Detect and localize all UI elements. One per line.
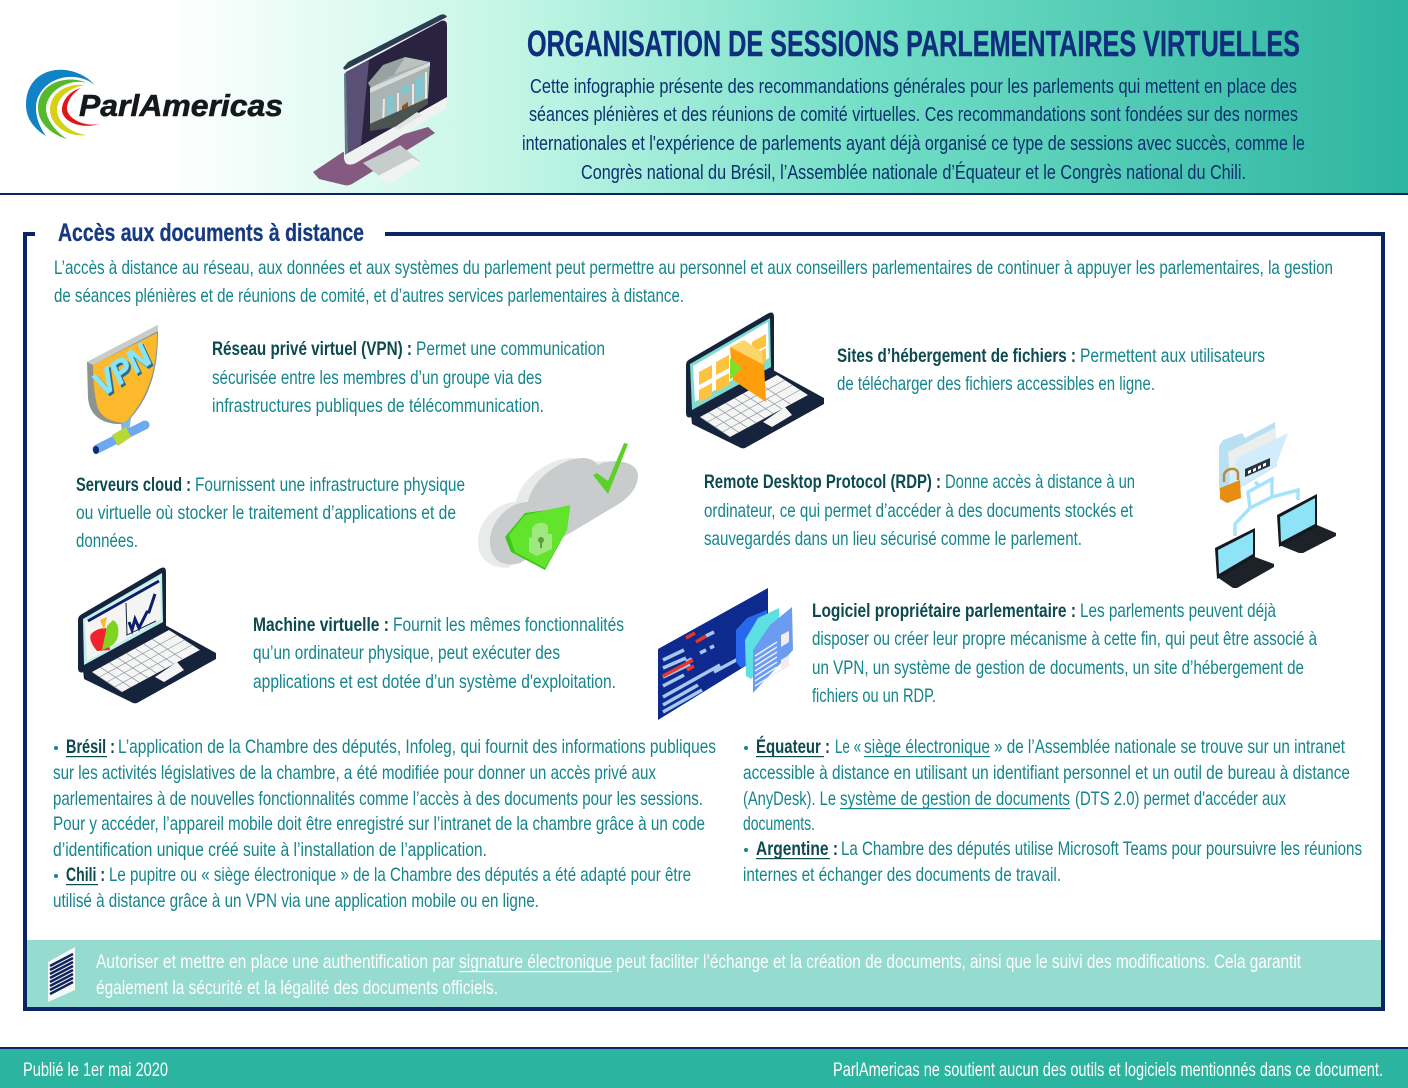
- icon: document: [48, 947, 75, 1002]
- icon: monitor showing parliament building: [313, 14, 447, 185]
- text: cloud servers: Fournissent une infrastructure physique: [195, 474, 465, 496]
- text: RDP: [704, 471, 1135, 550]
- text: Brazil and Chile examples: Chili :: [66, 864, 105, 886]
- text: Ecuador and Argentina examples: système de gestion de documents: [840, 788, 1070, 810]
- text: virtual machine: Machine virtuelle :: [253, 614, 389, 636]
- text: Brazil and Chile examples: [53, 736, 716, 912]
- callout: electronic signature: également la sécurité et la légalité des documents officiels.: [96, 977, 498, 999]
- section intro: de séances plénières et de réunions de comité, et d’autres services parlementaires à distance.: [54, 285, 684, 307]
- text: RDP: Remote Desktop Protocol (RDP) :: [704, 471, 941, 493]
- icon: folder, lock and networked laptops: [1215, 422, 1336, 588]
- icon: laptop with charts: [78, 568, 216, 703]
- text: cloud servers: [76, 474, 465, 552]
- icon: VPN shield: VPN: [88, 338, 161, 405]
- text: VPN: Permet une communication: [416, 338, 605, 360]
- text: file hosting sites: de télécharger des fichiers accessibles en ligne.: [837, 373, 1155, 395]
- text: Ecuador and Argentina examples: Le «: [835, 736, 861, 758]
- intro text: Congrès national du Brésil, l’Assemblée nationale d’Équateur et le Congrès national du Chili.: [581, 161, 1246, 184]
- text: Ecuador and Argentina examples: (DTS 2.0) permet d'accéder aux: [1075, 788, 1286, 810]
- icon: laptop with folder: [686, 313, 824, 448]
- footer: Publié le 1er mai 2020: [23, 1059, 168, 1081]
- logo: ParlAmericas: [26, 70, 283, 139]
- logo: ParlAmericas: ParlAmericas: [79, 88, 283, 123]
- text: Brazil and Chile examples: d’identification unique créé suite à l’installation de l’application.: [53, 839, 487, 861]
- header banner: [0, 0, 1408, 195]
- text: proprietary software: [812, 600, 1317, 707]
- text: Brazil and Chile examples: Le pupitre ou « siège électronique » de la Chambre des députés a été adapté pour être: [109, 864, 691, 886]
- text: Ecuador and Argentina examples: (AnyDesk). Le: [743, 788, 836, 810]
- text: Brazil and Chile examples: utilisé à distance grâce à un VPN via une application mobile ou en ligne.: [53, 890, 539, 912]
- text: RDP: sauvegardés dans un lieu sécurisé comme le parlement.: [704, 528, 1082, 550]
- text: Brazil and Chile examples: L’application de la Chambre des députés, Infoleg, qui fournit des informations publiques: [118, 736, 716, 758]
- text: Brazil and Chile examples: Pour y accéder, l’appareil mobile doit être enregistré sur l’intranet de la chambre grâce à un code: [53, 813, 705, 835]
- section intro: [54, 257, 1333, 307]
- text: Brazil and Chile examples: parlementaires à de nouvelles fonctionnalités comme l’accès à des documents pour les sessions.: [53, 788, 703, 810]
- text: proprietary software: Les parlements peuvent déjà: [1080, 600, 1276, 622]
- text: virtual machine: qu’un ordinateur physique, peut exécuter des: [253, 642, 560, 664]
- text: VPN: sécurisée entre les membres d’un groupe via des: [212, 367, 542, 389]
- text: Ecuador and Argentina examples: internes et échanger des documents de travail.: [743, 864, 1061, 886]
- text: Ecuador and Argentina examples: [743, 735, 1362, 886]
- text: Ecuador and Argentina examples: Équateur :: [756, 735, 830, 758]
- callout: electronic signature: signature électronique: [459, 951, 612, 973]
- text: Brazil and Chile examples: Brésil :: [66, 736, 115, 758]
- icon: VPN shield: VPN: [86, 336, 159, 403]
- intro text: [522, 75, 1305, 184]
- text: virtual machine: [253, 614, 624, 693]
- text: virtual machine: applications et est dotée d’un système d'exploitation.: [253, 671, 616, 693]
- text: Ecuador and Argentina examples: Argentine :: [756, 838, 838, 860]
- text: proprietary software: Logiciel propriétaire parlementaire :: [812, 600, 1076, 622]
- text: file hosting sites: Sites d’hébergement de fichiers :: [837, 345, 1076, 367]
- text: VPN: Réseau privé virtuel (VPN) :: [212, 338, 412, 360]
- text: VPN: [212, 338, 605, 417]
- text: file hosting sites: [837, 345, 1265, 395]
- text: Ecuador and Argentina examples: siège électronique: [864, 736, 990, 758]
- footer: [0, 1047, 1408, 1088]
- text: RDP: Donne accès à distance à un: [945, 471, 1135, 493]
- text: cloud servers: données.: [76, 530, 138, 552]
- text: Ecuador and Argentina examples: documents.: [743, 813, 815, 835]
- text: file hosting sites: Permettent aux utilisateurs: [1080, 345, 1265, 367]
- text: VPN: infrastructures publiques de télécommunication.: [212, 395, 544, 417]
- callout: electronic signature: Autoriser et mettre en place une authentification par: [96, 951, 455, 973]
- section heading: Accès aux documents à distance: [58, 219, 364, 247]
- icon: code panel and documents: [658, 588, 793, 720]
- callout: electronic signature: [27, 940, 1381, 1007]
- section frame: [25, 234, 1383, 1009]
- text: proprietary software: fichiers ou un RDP.: [812, 685, 936, 707]
- text: virtual machine: Fournit les mêmes fonctionnalités: [393, 614, 624, 636]
- text: Brazil and Chile examples: sur les activités législatives de la chambre, a été modifiée pour donner un accès privé aux: [53, 762, 656, 784]
- text: cloud servers: Serveurs cloud :: [76, 474, 191, 496]
- text: RDP: ordinateur, ce qui permet d’accéder à des documents stockés et: [704, 500, 1133, 522]
- icon: VPN shield: [86, 325, 161, 454]
- icon: secure cloud: [478, 443, 638, 570]
- text: cloud servers: ou virtuelle où stocker le traitement d’applications et de: [76, 502, 456, 524]
